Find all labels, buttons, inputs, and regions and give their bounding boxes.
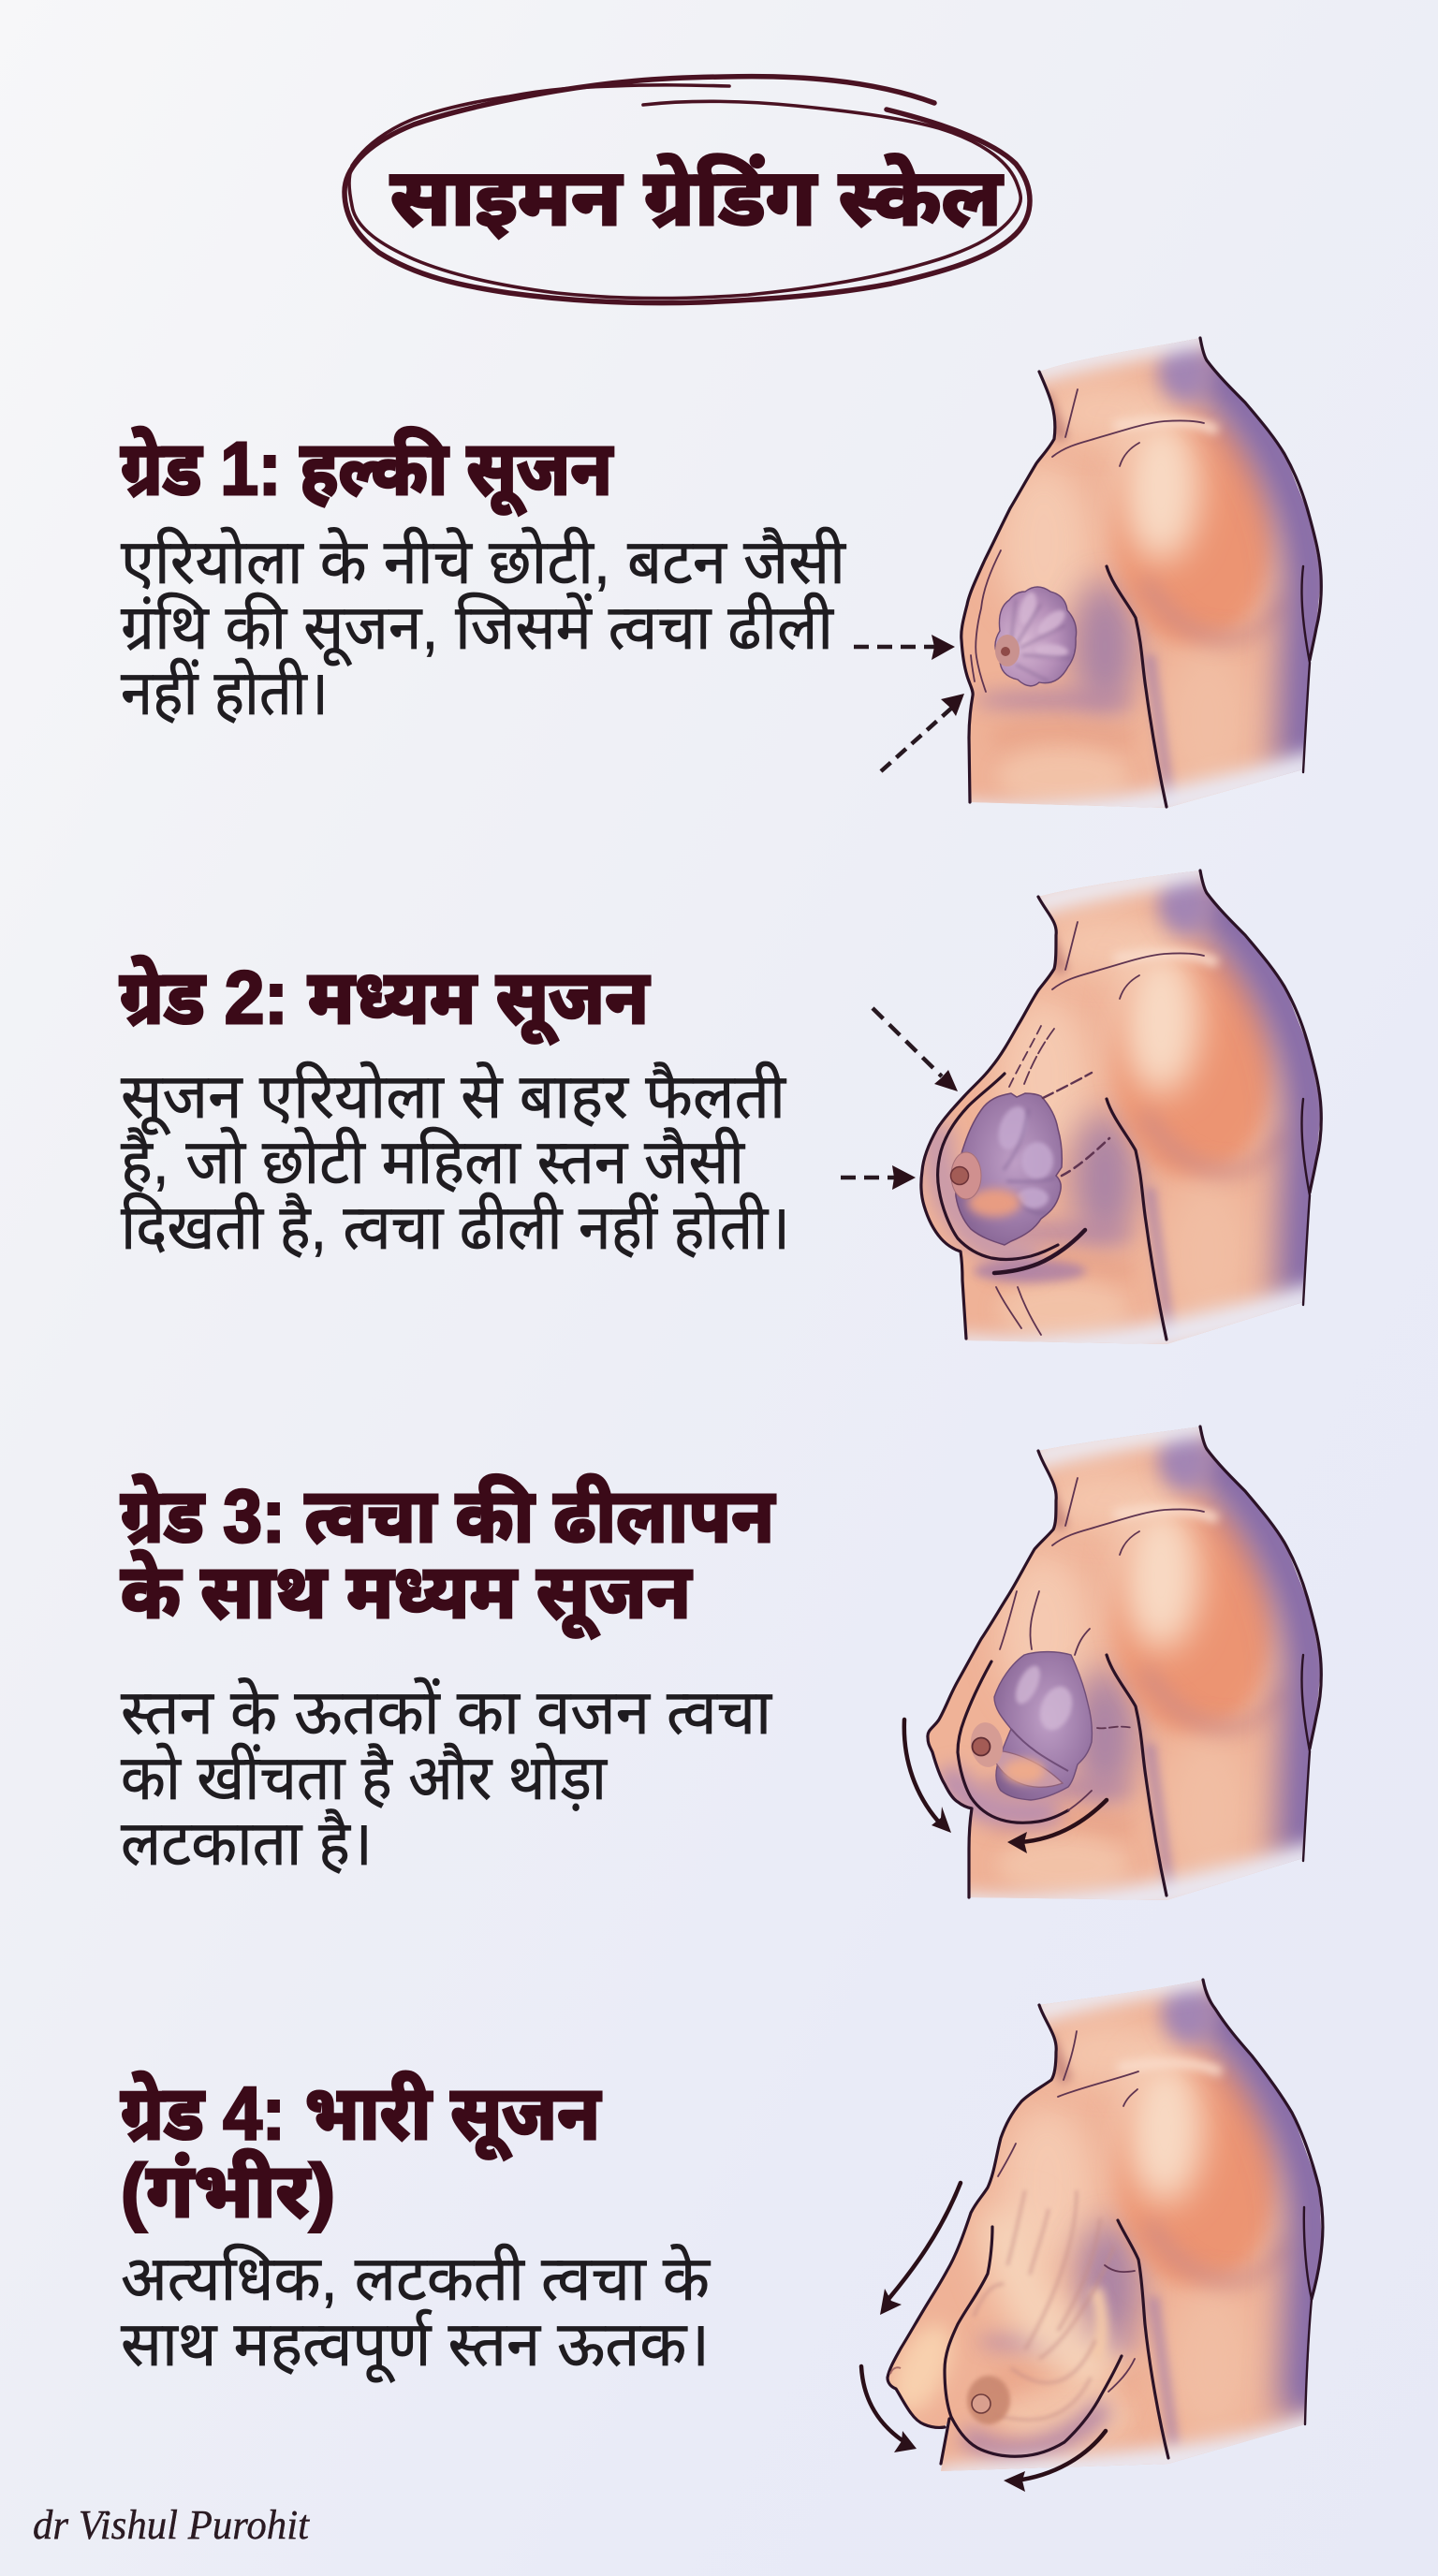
grade 3 description: स्तन के ऊतकों का वजन त्वचा — [121, 1676, 773, 1748]
grade 4 heading: (गंभीर) — [121, 2149, 335, 2232]
arrow: bottom curved — [1007, 1800, 1107, 1853]
torso shading — [962, 338, 1320, 808]
torso outlines — [888, 1980, 1323, 2464]
panel: grade 1 text — [121, 426, 847, 728]
grade 2 description: दिखती है, त्वचा ढीली नहीं होती। — [121, 1192, 790, 1263]
signature: dr Vishul Purohit — [33, 2502, 311, 2548]
areola and nipple — [951, 1152, 981, 1199]
gland — [995, 587, 1077, 686]
torso shading — [929, 1427, 1320, 1900]
grade 2 description: सूजन एरियोला से बाहर फैलती — [121, 1061, 787, 1135]
arrow: upper diagonal — [880, 2183, 961, 2315]
arrow: horizontal dashed — [854, 635, 955, 660]
grade 1 heading: ग्रेड 1: हल्की सूजन — [121, 426, 614, 516]
torso outlines — [928, 1427, 1321, 1897]
grade 2 heading: ग्रेड 2: मध्यम सूजन — [120, 955, 651, 1045]
arrow: diagonal dashed — [873, 1008, 958, 1091]
torso outlines — [921, 871, 1321, 1339]
panel: grade 2 text — [120, 955, 790, 1263]
hand-drawn ellipse — [345, 77, 1030, 303]
upper nipple contour — [890, 2367, 901, 2374]
gland — [968, 1652, 1092, 1800]
grade 4 description — [121, 2243, 711, 2383]
areola and nipple — [967, 2376, 1010, 2424]
grade 3 heading: के साथ मध्यम सूजन — [121, 1549, 693, 1639]
areola and nipple — [968, 1720, 1005, 1769]
title — [345, 77, 1030, 303]
panel: grade 3 illustration — [902, 1425, 1323, 1900]
grade 3 heading: ग्रेड 3: त्वचा की ढीलापन — [121, 1473, 776, 1558]
arrow: left curved — [904, 1720, 951, 1833]
panel: grade 3 text — [121, 1473, 776, 1879]
grade 4 heading — [121, 2071, 602, 2232]
grade 2 description — [121, 1061, 790, 1263]
grade 4 description: साथ महत्वपूर्ण स्तन ऊतक। — [121, 2308, 710, 2383]
title text: साइमन ग्रेडिंग स्केल — [390, 154, 1004, 242]
torso shading — [923, 871, 1320, 1344]
arrow: horizontal dashed — [841, 1165, 916, 1190]
grade 3 description — [121, 1676, 773, 1879]
panel: grade 4 text — [121, 2071, 711, 2383]
panel: grade 4 illustration — [859, 1978, 1324, 2492]
grade 3 heading — [121, 1473, 776, 1639]
arrow: diagonal dashed — [881, 694, 964, 771]
grade 2 description: है, जो छोटी महिला स्तन जैसी — [121, 1126, 746, 1197]
grade 4 description: अत्यधिक, लटकती त्वचा के — [121, 2243, 711, 2314]
tissue dashes — [1009, 1026, 1109, 1176]
grade 4 heading: ग्रेड 4: भारी सूजन — [121, 2071, 602, 2160]
panel: grade 2 illustration — [841, 869, 1323, 1344]
grade 1 description: एरियोला के नीचे छोटी, बटन जैसी — [121, 526, 847, 597]
arrow: left curved — [861, 2366, 917, 2452]
grade 1 description: नहीं होती। — [121, 657, 329, 728]
grade 3 description: लटकाता है। — [121, 1808, 373, 1879]
torso outlines — [961, 338, 1321, 807]
arrow: bottom curved — [1004, 2431, 1106, 2492]
grade 3 description: को खींचता है और थोड़ा — [121, 1742, 609, 1813]
grade 1 description — [121, 526, 847, 728]
grade 1 description: ग्रंथि की सूजन, जिसमें त्वचा ढीली — [121, 592, 835, 666]
panel: grade 1 illustration — [854, 336, 1323, 809]
gland — [951, 1093, 1062, 1245]
nipple — [995, 635, 1020, 666]
torso shading — [889, 1980, 1322, 2471]
